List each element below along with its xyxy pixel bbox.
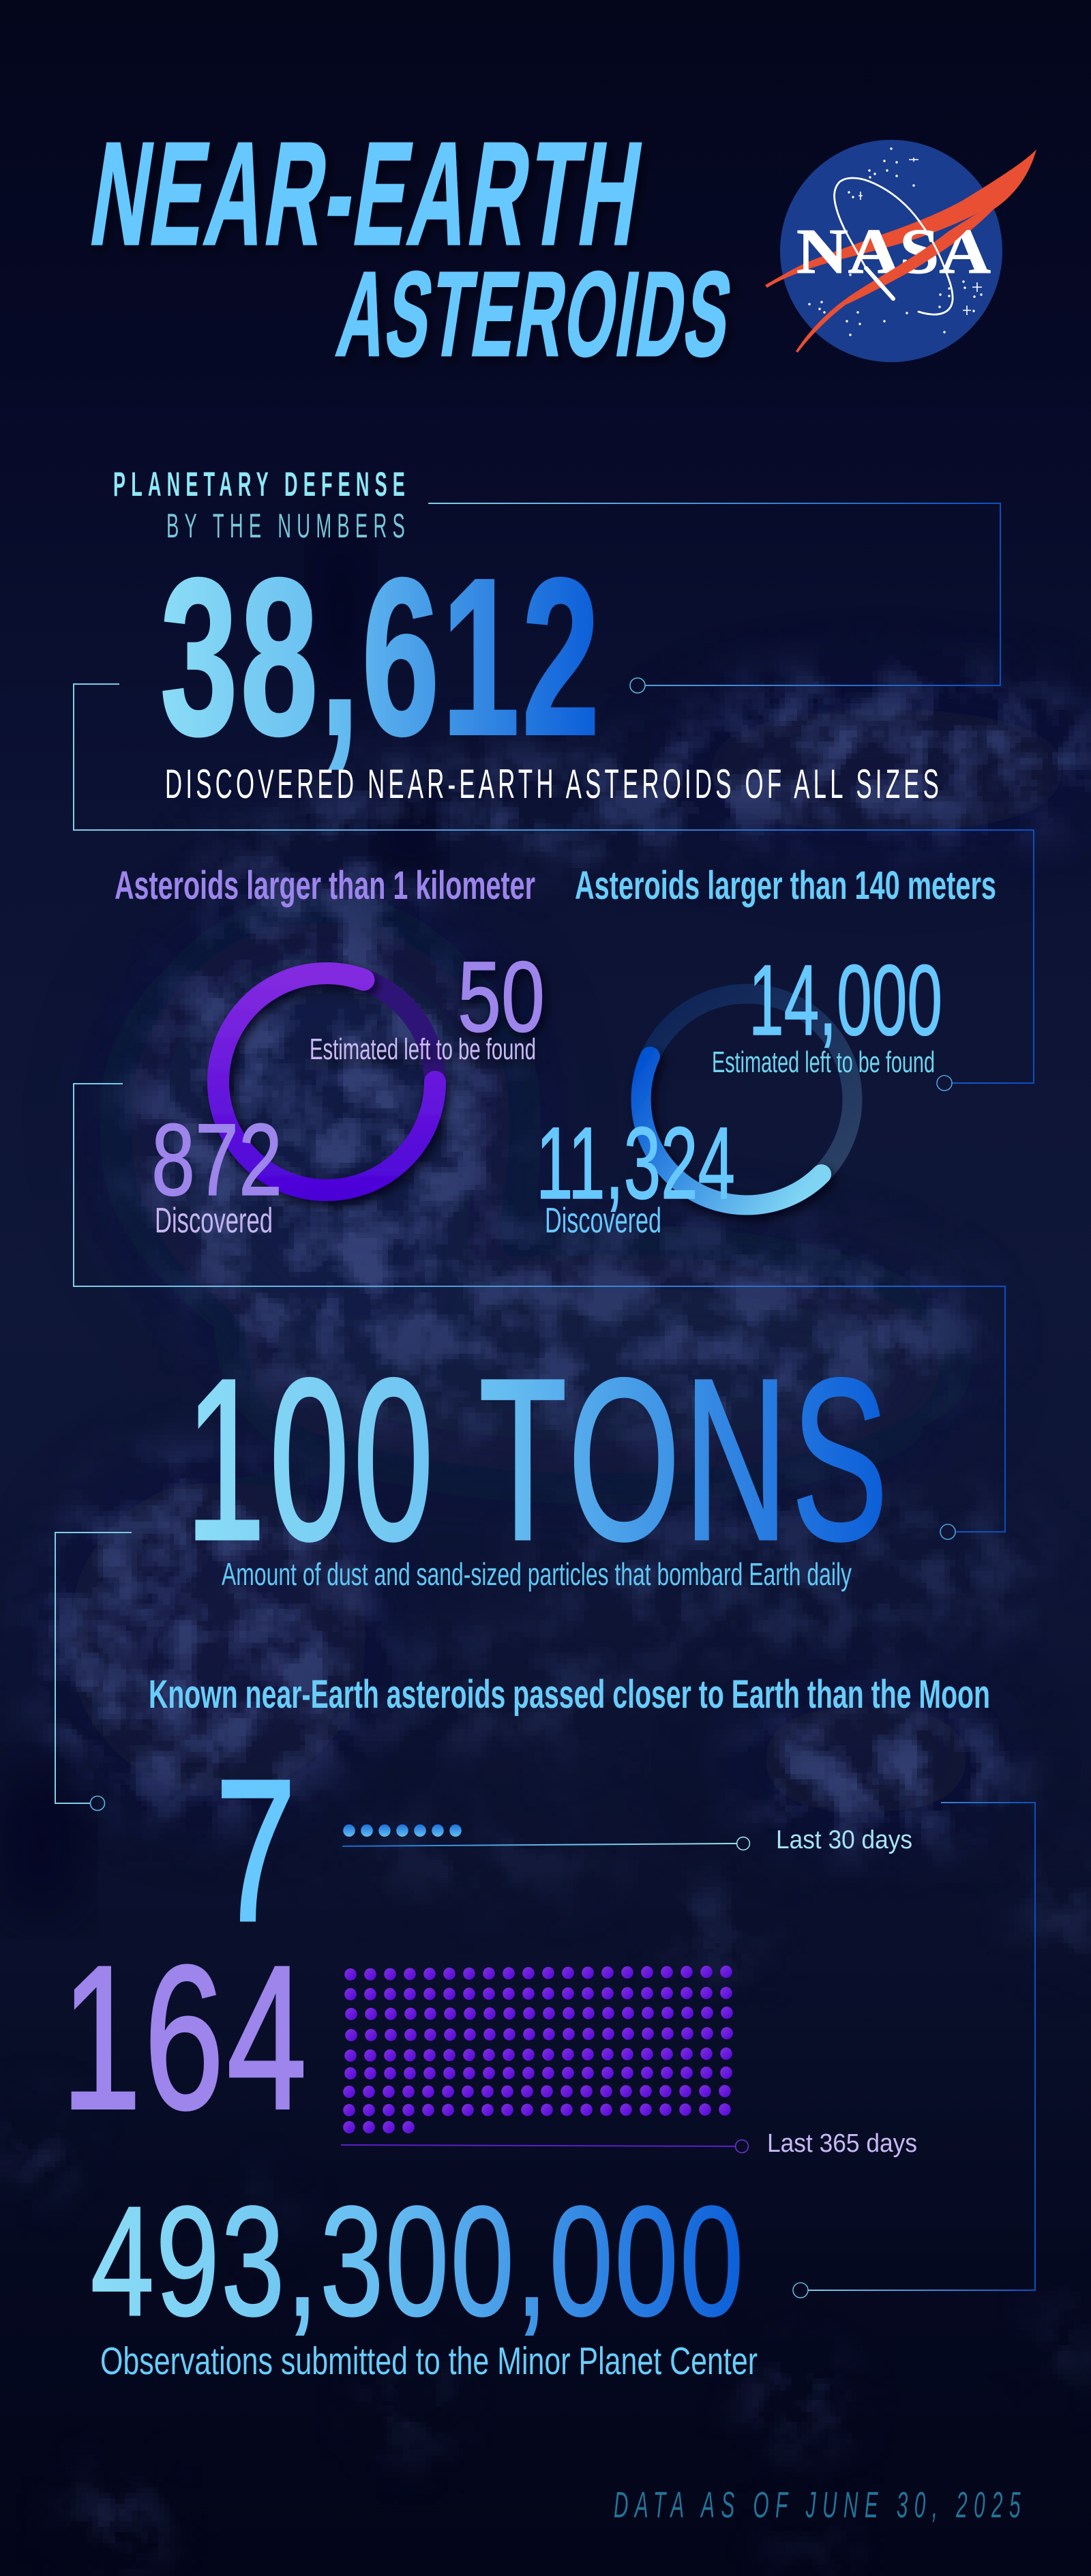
stat: observations <box>91 2175 758 2383</box>
heading: larger than 1 kilometer: Asteroids larger than 1 kilometer <box>115 863 535 908</box>
leader: last 365 days <box>341 2140 748 2152</box>
heading: planetary defense <box>113 465 410 545</box>
leader: last 30 days <box>342 1837 749 1850</box>
stat: observations: 493,300,000 <box>91 2175 745 2348</box>
title <box>82 111 742 381</box>
stat: 872 discovered: Discovered <box>155 1201 273 1241</box>
heading: planetary defense: BY THE NUMBERS <box>166 507 410 545</box>
stat: 14,000 left to be found: 14,000 <box>749 945 942 1056</box>
heading: planetary defense: PLANETARY DEFENSE <box>113 465 410 503</box>
icon: NASA logo <box>765 140 1036 362</box>
stat: 14,000 left to be found: Estimated left to be found <box>712 1046 935 1079</box>
stat: observations: Observations submitted to the Minor Planet Center <box>100 2339 758 2383</box>
icon: NASA logo: NASA <box>796 216 991 287</box>
stat: 872 discovered <box>151 1102 282 1241</box>
connector: observations <box>793 1803 1035 2298</box>
dots: last 365 days <box>343 1966 733 2133</box>
stat: 11,324 discovered: 11,324 <box>536 1106 735 1220</box>
connector: close approaches left <box>55 1533 132 1810</box>
stat: 14,000 left to be found <box>712 945 942 1079</box>
connector: top stat <box>428 503 1000 693</box>
stat: 11,324 discovered: Discovered <box>545 1201 661 1241</box>
donut: 1 kilometer <box>218 973 435 1190</box>
stat: 872 discovered: 872 <box>151 1102 282 1217</box>
stat: 11,324 discovered <box>536 1106 735 1241</box>
label: last 365 days: Last 365 days <box>767 2129 917 2158</box>
stat: 50 left to be found: Estimated left to be found <box>310 1033 536 1066</box>
stat: 164: 164 <box>61 1923 310 2152</box>
connector: 100 tons <box>74 1084 1005 1539</box>
stat: discovered near-Earth asteroids: 38,612 <box>160 533 602 782</box>
title: ASTEROIDS <box>330 247 742 381</box>
stat: 50 left to be found <box>310 941 545 1066</box>
label: last 30 days: Last 30 days <box>776 1826 912 1854</box>
connector: sizes section <box>74 684 1034 1091</box>
donut: 140 meters <box>641 994 852 1205</box>
dots: last 30 days <box>343 1824 462 1837</box>
stat: 7: 7 <box>215 1738 296 1963</box>
stat: 50 left to be found: 50 <box>458 941 545 1053</box>
